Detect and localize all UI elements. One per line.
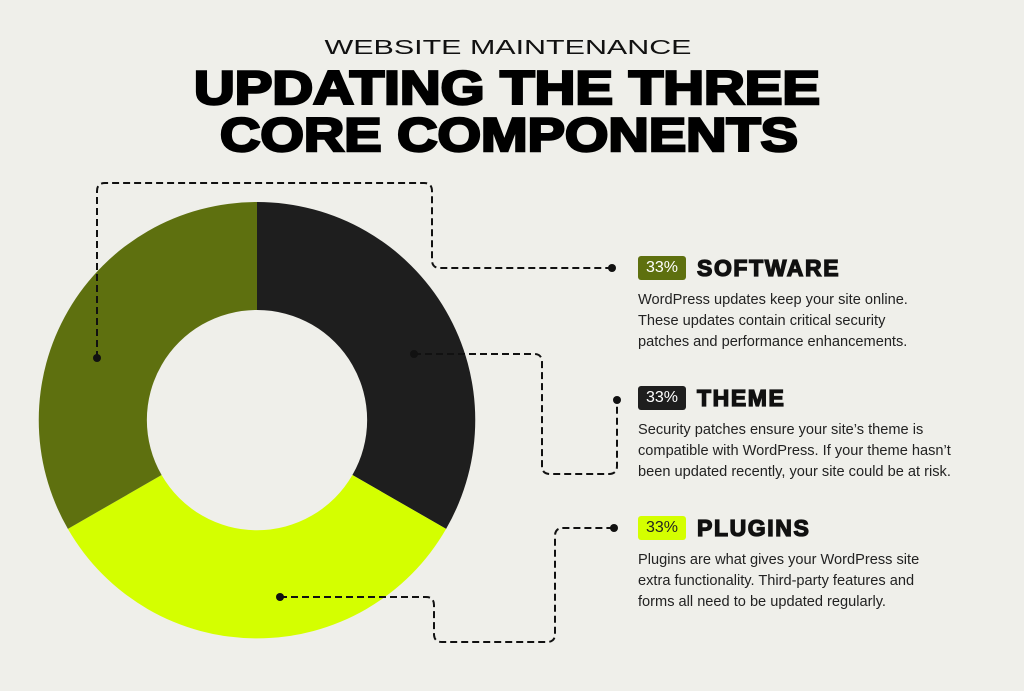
text: plugins: Plugins are what gives your WordPress site bbox=[638, 552, 919, 568]
subtitle: WEBSITE MAINTENANCE bbox=[324, 37, 692, 59]
text: software bbox=[638, 292, 908, 350]
connector: theme bbox=[414, 354, 617, 474]
connector: plugins bbox=[280, 528, 614, 642]
heading: plugins bbox=[638, 514, 810, 540]
text: software: WordPress updates keep your site online. bbox=[638, 292, 908, 308]
text: theme bbox=[638, 422, 951, 480]
text: plugins: forms all need to be updated regularly. bbox=[638, 594, 886, 610]
heading: theme bbox=[638, 384, 786, 410]
main title bbox=[194, 61, 820, 161]
text: plugins: extra functionality. Third-party features and bbox=[638, 573, 914, 589]
main title: CORE COMPONENTS bbox=[220, 108, 798, 161]
text: software: These updates contain critical security bbox=[638, 313, 885, 329]
text: software: patches and performance enhancements. bbox=[638, 334, 907, 350]
text: theme: compatible with WordPress. If your theme hasn’t bbox=[638, 443, 951, 459]
main title: UPDATING THE THREE bbox=[194, 61, 820, 114]
heading: plugins: PLUGINS bbox=[697, 514, 810, 540]
heading: theme: 33% bbox=[646, 389, 678, 406]
connector dots bbox=[93, 264, 621, 601]
panel: theme bbox=[638, 384, 951, 480]
text: theme: Security patches ensure your site’s theme is bbox=[638, 422, 923, 438]
donut chart bbox=[39, 202, 475, 638]
heading: software: SOFTWARE bbox=[697, 254, 840, 280]
text: theme: been updated recently, your site could be at risk. bbox=[638, 464, 951, 480]
heading: software: 33% bbox=[646, 259, 678, 276]
text: plugins bbox=[638, 552, 919, 610]
heading: plugins: 33% bbox=[646, 519, 678, 536]
panel: plugins bbox=[638, 514, 919, 610]
panel: software bbox=[638, 254, 908, 350]
connector: software bbox=[97, 183, 612, 358]
heading: theme: THEME bbox=[697, 384, 786, 410]
